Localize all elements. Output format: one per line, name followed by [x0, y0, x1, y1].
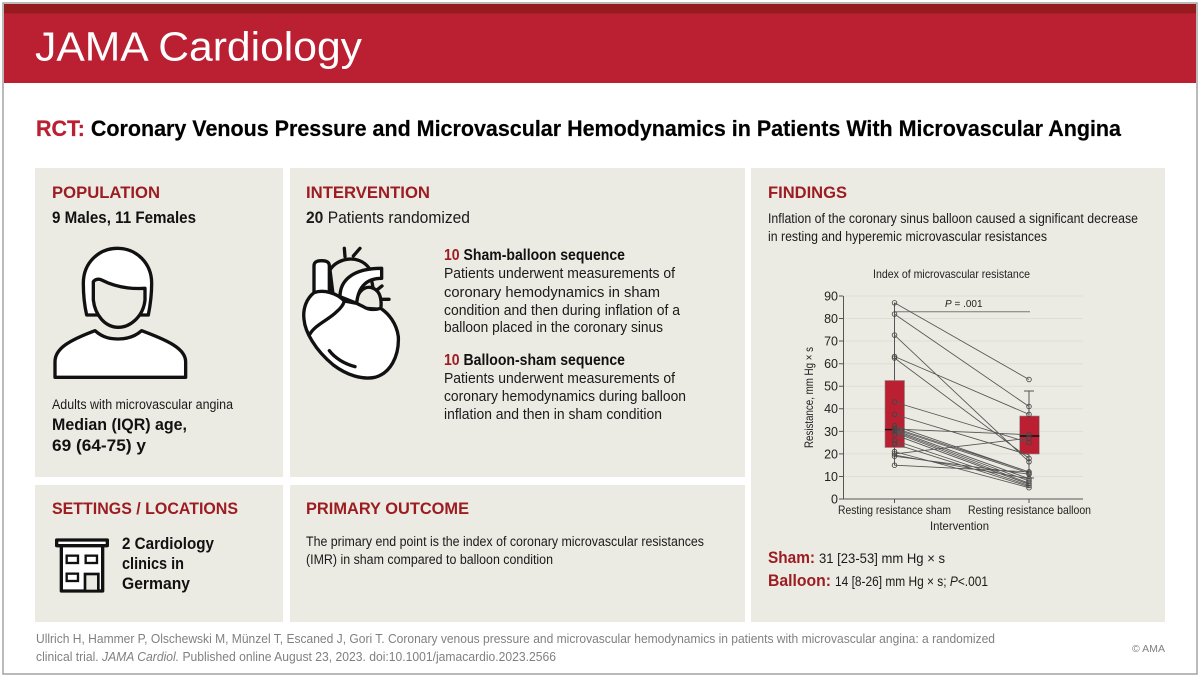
icon: person	[55, 248, 186, 377]
panel: intervention	[290, 168, 745, 477]
intervention heading: INTERVENTION	[306, 183, 430, 202]
y axis ticks: 90	[824, 290, 838, 304]
header banner	[4, 4, 1196, 83]
y axis ticks: 20	[824, 447, 838, 461]
sham-balloon sequence: Patients underwent measurements of	[444, 266, 676, 282]
sites text: clinics in	[122, 555, 184, 573]
citation: clinical trial. JAMA Cardiol. Published online August 23, 2023. doi:10.1001/jamacardio.2023.2566	[36, 650, 556, 664]
y axis ticks	[824, 290, 838, 506]
randomized count: 20 Patients randomized	[306, 209, 470, 227]
panel: findings	[751, 168, 1165, 622]
findings heading: FINDINGS	[768, 183, 847, 202]
patient description: Adults with microvascular angina	[52, 397, 233, 412]
icon: heart	[304, 248, 398, 378]
y axis ticks: 50	[824, 380, 838, 394]
sham-balloon sequence: condition and then during inflation of a	[444, 303, 681, 319]
population heading: POPULATION	[52, 183, 160, 202]
x axis labels: Resting resistance sham	[838, 503, 951, 517]
p value	[895, 299, 1030, 312]
y axis ticks: 80	[824, 312, 838, 326]
copyright: © AMA	[1132, 643, 1165, 655]
settings heading: SETTINGS / LOCATIONS	[52, 499, 238, 518]
y axis ticks: 70	[824, 334, 838, 348]
balloon result: Balloon:	[768, 571, 831, 590]
chart: index of microvascular resistance	[802, 267, 1091, 533]
x axis labels: Resting resistance balloon	[968, 503, 1091, 517]
balloon-sham sequence	[444, 352, 686, 423]
balloon result: 14 [8-26] mm Hg × s; P<.001	[835, 573, 988, 589]
sham-balloon sequence: 10 Sham-balloon sequence	[444, 247, 625, 264]
panel: population	[35, 168, 283, 477]
balloon-sham sequence: inflation and then in sham condition	[444, 407, 662, 423]
balloon-sham sequence: 10 Balloon-sham sequence	[444, 352, 625, 369]
title: RCT: Coronary Venous Pressure and Microvascular Hemodynamics in Patients With Microvascular Angina	[36, 116, 1121, 141]
primary outcome text: (IMR) in sham compared to balloon condition	[306, 552, 553, 567]
sites text: 2 Cardiology	[122, 535, 215, 553]
y axis ticks: 30	[824, 425, 838, 439]
sham-balloon sequence: coronary hemodynamics in sham	[444, 285, 660, 301]
panel: primary outcome	[290, 485, 745, 622]
balloon-sham sequence: coronary hemodynamics during balloon	[444, 389, 686, 405]
paired patient lines	[894, 303, 1029, 488]
balloon result	[768, 571, 988, 590]
sham result: Sham:	[768, 548, 815, 567]
sites text: Germany	[122, 575, 191, 593]
data points	[892, 300, 1031, 490]
findings text: in resting and hyperemic microvascular resistances	[768, 229, 1047, 244]
box: balloon	[1020, 391, 1039, 488]
sex counts: 9 Males, 11 Females	[52, 209, 196, 227]
sham result: 31 [23-53] mm Hg × s	[819, 550, 945, 566]
findings text: Inflation of the coronary sinus balloon caused a significant decrease	[768, 211, 1138, 226]
y axis label: Resistance, mm Hg × s	[802, 347, 816, 448]
balloon-sham sequence: Patients underwent measurements of	[444, 371, 676, 387]
median age: 69 (64-75) y	[52, 437, 147, 455]
citation: Ullrich H, Hammer P, Olschewski M, Münzel T, Escaned J, Gori T. Coronary venous pressure and microvascular hemodynamics in patients with microvascular angina: a randomized	[36, 632, 995, 646]
chart title: Index of microvascular resistance	[873, 267, 1030, 281]
panel: settings / locations	[35, 485, 283, 622]
x axis labels	[838, 503, 1091, 533]
x axis labels: Intervention	[930, 519, 989, 533]
median age	[52, 416, 187, 455]
sham result	[768, 548, 945, 567]
primary outcome heading: PRIMARY OUTCOME	[306, 499, 469, 518]
y axis ticks: 10	[824, 470, 838, 484]
primary outcome text	[306, 534, 704, 567]
p value: P = .001	[945, 299, 983, 310]
median age: Median (IQR) age,	[52, 416, 187, 434]
y axis ticks: 0	[831, 492, 838, 506]
y axis ticks: 40	[824, 402, 838, 416]
primary outcome text: The primary end point is the index of coronary microvascular resistances	[306, 534, 704, 549]
sites text	[122, 535, 215, 593]
findings text	[768, 211, 1138, 244]
citation	[36, 632, 995, 664]
icon: building	[57, 540, 107, 591]
sham-balloon sequence: balloon placed in the coronary sinus	[444, 320, 663, 336]
box: sham	[885, 303, 904, 465]
sham-balloon sequence	[444, 247, 681, 336]
journal name: JAMA Cardiology	[35, 24, 363, 70]
y axis ticks: 60	[824, 357, 838, 371]
